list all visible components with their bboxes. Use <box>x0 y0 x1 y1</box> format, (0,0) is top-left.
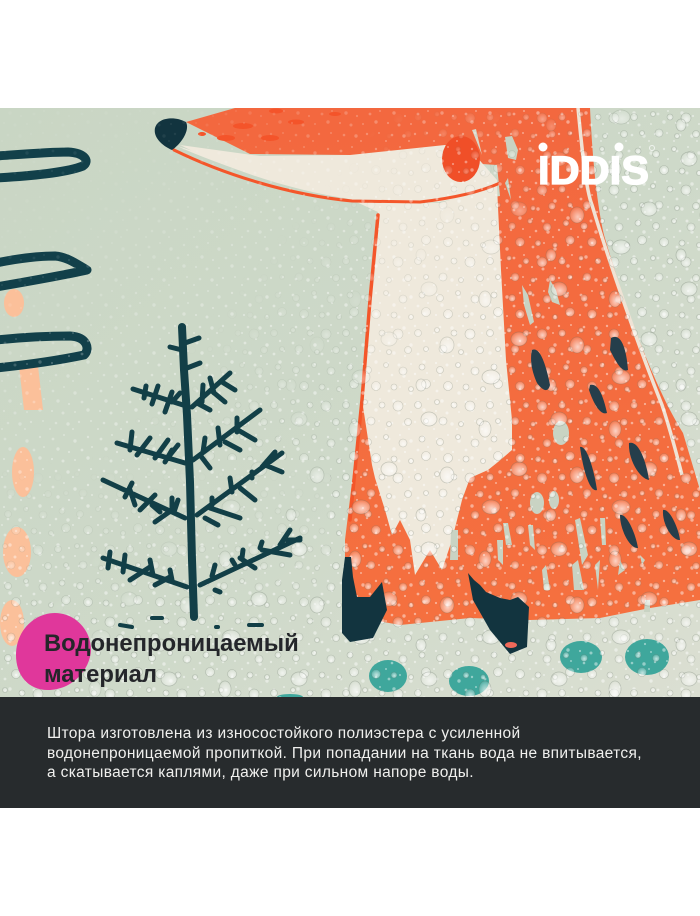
white side stripe <box>578 108 682 475</box>
fox left foot <box>342 557 387 642</box>
mushroom caps <box>0 152 87 368</box>
description text: Штора изготовлена из износостойкого полиэстера с усиленной <box>47 725 521 742</box>
tree trunk <box>182 327 194 617</box>
small droplets <box>0 108 700 697</box>
fir tree <box>103 327 300 627</box>
head fur speckles <box>198 108 341 141</box>
heading: Водонепроницаемый <box>44 630 299 657</box>
mushroom stems <box>0 289 43 646</box>
white muzzle upper <box>180 145 497 202</box>
tree ground dashes <box>120 618 262 627</box>
photo panel: wet fabric with fox illustration <box>0 108 700 697</box>
description text: а скатывается каплями, даже при сильном напоре воды. <box>47 764 474 781</box>
fox muzzle and chest <box>177 146 512 575</box>
side light patches <box>450 129 650 612</box>
fox orange outline lines <box>174 150 500 520</box>
teal ground spots <box>277 639 669 700</box>
tree branches <box>103 338 300 592</box>
text band <box>0 697 700 808</box>
pink accent blob <box>16 613 91 690</box>
description text <box>47 725 642 781</box>
mushrooms on the left edge <box>0 152 87 646</box>
fox illustration <box>155 108 700 625</box>
large droplets <box>88 110 700 697</box>
fox nose <box>155 118 187 150</box>
water droplets overlay <box>0 108 700 697</box>
right foot claw <box>505 642 517 648</box>
fabric background <box>0 108 700 697</box>
fox cheek <box>442 136 480 182</box>
heading: материал <box>44 661 157 688</box>
medium droplets <box>0 108 700 697</box>
fox right foot <box>468 573 529 654</box>
fox tail dark spots <box>531 337 680 548</box>
heading <box>44 630 299 688</box>
description text: водонепроницаемой пропиткой. При попадании на ткань вода не впитывается, <box>47 745 642 762</box>
fox dark markings and feet <box>342 337 680 654</box>
fox body and head <box>186 108 700 625</box>
